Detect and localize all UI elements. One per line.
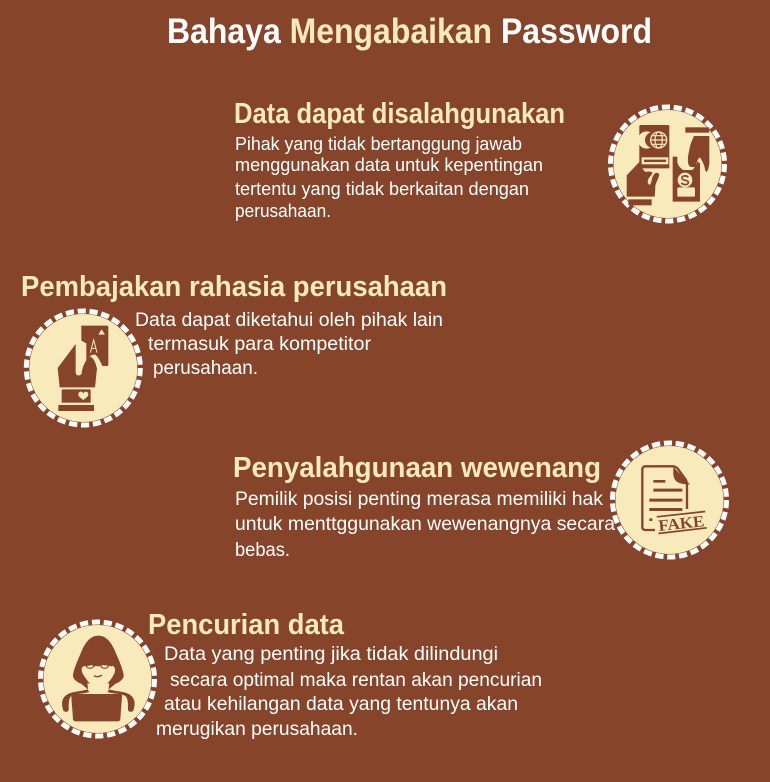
text block: penyalahgunaan wewenang: Pemilik posisi penting merasa memiliki hak — [235, 488, 603, 510]
icon: fake document — [612, 443, 726, 557]
heading: pembajakan rahasia perusahaan: Pembajakan rahasia perusahaan — [21, 271, 447, 303]
icon: hooded hacker with laptop — [40, 622, 154, 736]
icon: hand holding a card — [26, 311, 140, 425]
text block: data dapat disalahgunakan: menggunakan data untuk kepentingan — [235, 155, 543, 175]
text block: pencurian data: secara optimal maka rentan akan pencurian — [170, 669, 542, 691]
text block: pembajakan rahasia perusahaan: termasuk para kompetitor — [148, 333, 372, 355]
text block: pencurian data: Data yang penting jika tidak dilindungi — [164, 643, 498, 665]
heading: pencurian data: Pencurian data — [148, 609, 345, 641]
text block: pencurian data — [156, 643, 542, 740]
panel: pembajakan rahasia perusahaan — [21, 271, 447, 425]
text block: penyalahgunaan wewenang: bebas. — [235, 539, 290, 561]
text block: pembajakan rahasia perusahaan — [135, 309, 443, 379]
text block: penyalahgunaan wewenang: untuk menttggunakan wewenangnya secara — [235, 513, 615, 535]
text block: data dapat disalahgunakan — [235, 134, 543, 221]
text block: pembajakan rahasia perusahaan: Data dapat diketahui oleh pihak lain — [135, 309, 443, 331]
text block: pembajakan rahasia perusahaan: perusahaan. — [153, 357, 258, 379]
text block: pencurian data: merugikan perusahaan. — [156, 718, 358, 740]
text block: pencurian data: atau kehilangan data yang tentunya akan — [164, 693, 518, 715]
text block: penyalahgunaan wewenang — [235, 488, 615, 561]
panel: pencurian data — [40, 609, 542, 740]
text block: data dapat disalahgunakan: tertentu yang tidak berkaitan dengan — [235, 179, 529, 199]
text block: data dapat disalahgunakan: perusahaan. — [235, 201, 331, 221]
heading: penyalahgunaan wewenang: Penyalahgunaan wewenang — [233, 452, 601, 484]
icon: hands exchanging passport and money — [610, 107, 724, 221]
icon: fake document: FAKE — [658, 513, 705, 535]
heading: data dapat disalahgunakan: Data dapat disalahgunakan — [234, 98, 565, 130]
title: Bahaya Mengabaikan Password — [167, 12, 652, 51]
panel: penyalahgunaan wewenang — [233, 443, 726, 561]
panel: data dapat disalahgunakan — [234, 98, 724, 221]
text block: data dapat disalahgunakan: Pihak yang tidak bertanggung jawab — [235, 134, 522, 154]
